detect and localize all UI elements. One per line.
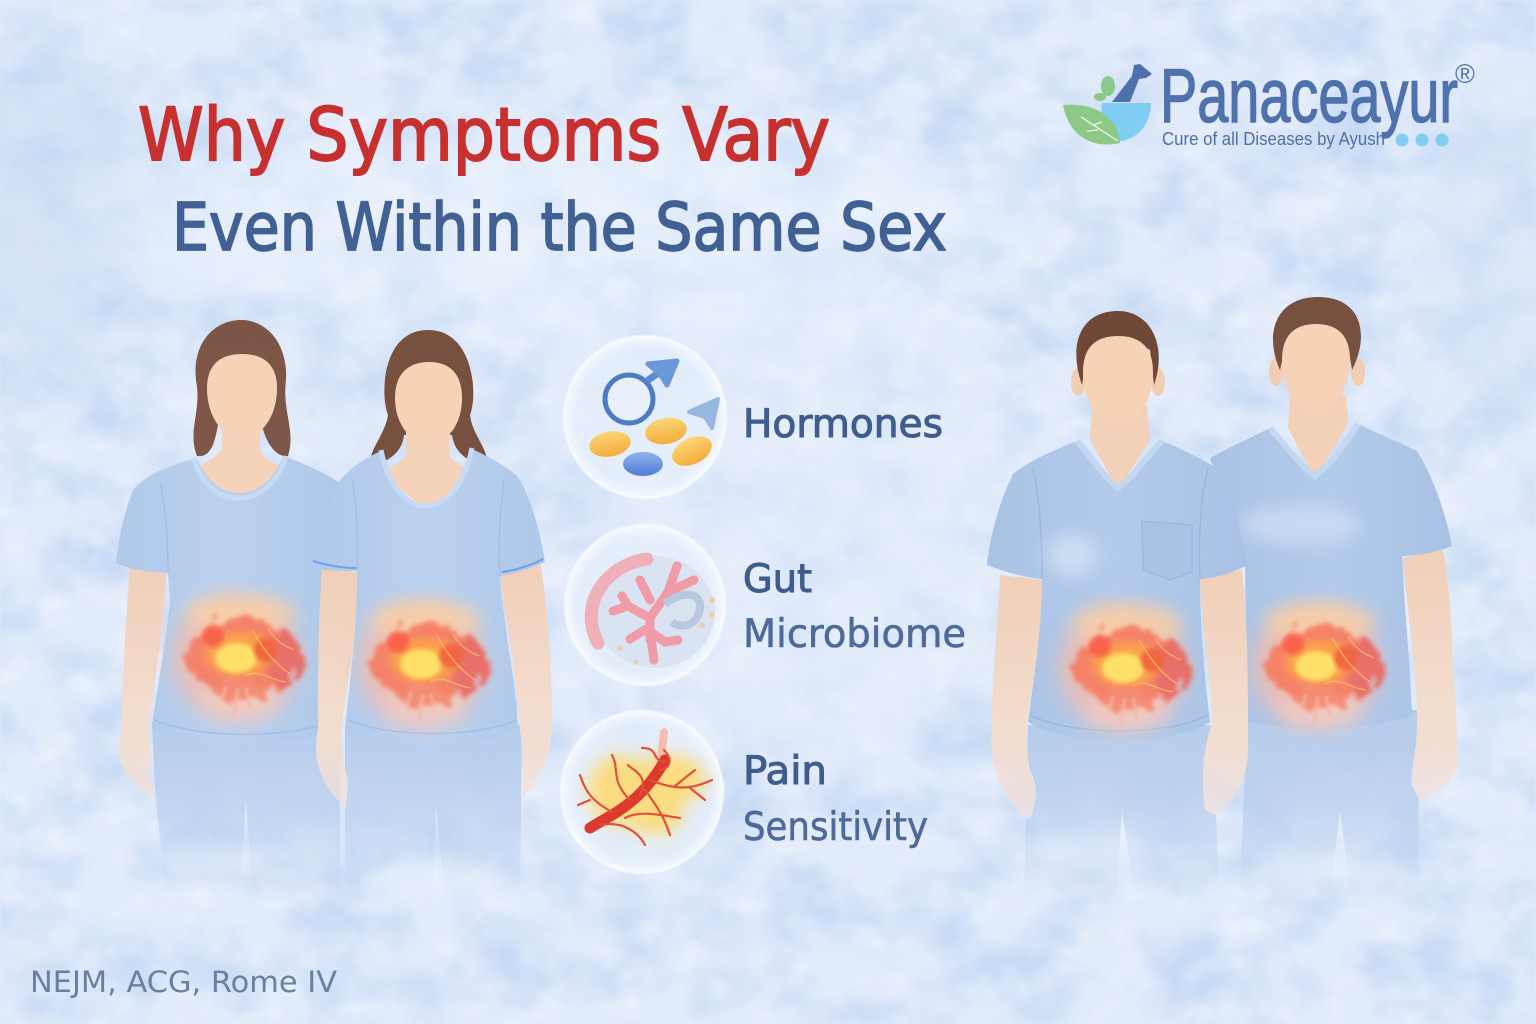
title line 1: Why Symptoms Vary (138, 93, 830, 178)
shirt (1210, 424, 1452, 728)
source citation: NEJM, ACG, Rome IV (30, 965, 337, 999)
blood vessels (578, 748, 712, 845)
figure: woman 2 (310, 330, 552, 900)
sleeve seam and hem (154, 482, 318, 734)
jeans (1024, 725, 1220, 900)
panel: pain sensitivity (561, 711, 928, 873)
panel: hormones (564, 336, 943, 498)
figure: woman 1 (116, 320, 340, 890)
nerve stalk (660, 732, 664, 768)
shirt (116, 456, 340, 745)
capsules (587, 415, 717, 476)
shirt (339, 450, 545, 725)
cloud reflections on shirt (1240, 505, 1360, 545)
collar (1270, 424, 1358, 476)
panel: gut microbiome (565, 525, 966, 685)
collar (194, 456, 286, 498)
pocket (1142, 521, 1192, 580)
left arm and hand (119, 566, 166, 798)
figure: man 1 (987, 311, 1248, 900)
logo: Panaceayur (1063, 54, 1475, 149)
figure: man 2 (1210, 297, 1458, 900)
registered mark: ® (1455, 59, 1475, 89)
icon: mortar and pestle with leaves (1063, 64, 1152, 145)
abdominal pain glow (1059, 604, 1189, 732)
left arm and hand (991, 575, 1042, 820)
hair (370, 330, 487, 467)
bottom mist (150, 834, 1400, 898)
collar (381, 448, 472, 506)
face (1083, 336, 1153, 424)
icon bubble: pain sensitivity (561, 711, 723, 873)
neck (1288, 395, 1348, 478)
right arm and hand (1403, 550, 1458, 801)
tagline dots (1396, 134, 1448, 146)
neck (1090, 405, 1150, 490)
cloud reflection on shirt (1046, 533, 1098, 577)
hair (1076, 311, 1159, 385)
left arm and hand (316, 570, 358, 808)
neck (388, 432, 464, 504)
ears (1071, 368, 1165, 396)
yellow inflammation (588, 754, 706, 835)
right arm and hand (1200, 570, 1248, 815)
ears (1269, 358, 1365, 386)
ears and neck (200, 430, 278, 493)
face (207, 354, 277, 438)
abdominal pain glow (1252, 602, 1382, 730)
panel: pain sensitivity: Sensitivity (743, 805, 928, 850)
jeans (152, 722, 340, 890)
tagline: Cure of all Diseases by Ayush (1162, 129, 1385, 149)
title line 2: Even Within the Same Sex (172, 189, 947, 266)
abdominal pain glow (172, 594, 302, 722)
collar (1077, 441, 1162, 488)
jeans (1240, 710, 1420, 900)
title (138, 93, 947, 266)
small arrow (689, 399, 718, 428)
blue-grey loop (665, 595, 700, 626)
panel: gut microbiome: Microbiome (743, 612, 966, 657)
label: Pain (743, 749, 827, 794)
right arm and hand (500, 560, 552, 798)
male symbol (605, 361, 677, 423)
hair (193, 320, 291, 456)
sleeve seam and hem (348, 478, 517, 734)
face (395, 362, 462, 443)
shirt (987, 441, 1248, 741)
intestine arc (591, 559, 647, 643)
label: Hormones (743, 402, 943, 447)
abdominal pain glow (357, 600, 487, 728)
sleeve trim (313, 559, 543, 572)
pink villi (613, 566, 694, 660)
icon bubble: gut microbiome (565, 525, 725, 685)
hair (1273, 297, 1361, 370)
jeans (345, 725, 522, 900)
face (1282, 324, 1350, 411)
sleeve seams and hem (1030, 468, 1208, 731)
icon bubble: hormones (564, 336, 726, 498)
label: Gut (743, 557, 812, 602)
